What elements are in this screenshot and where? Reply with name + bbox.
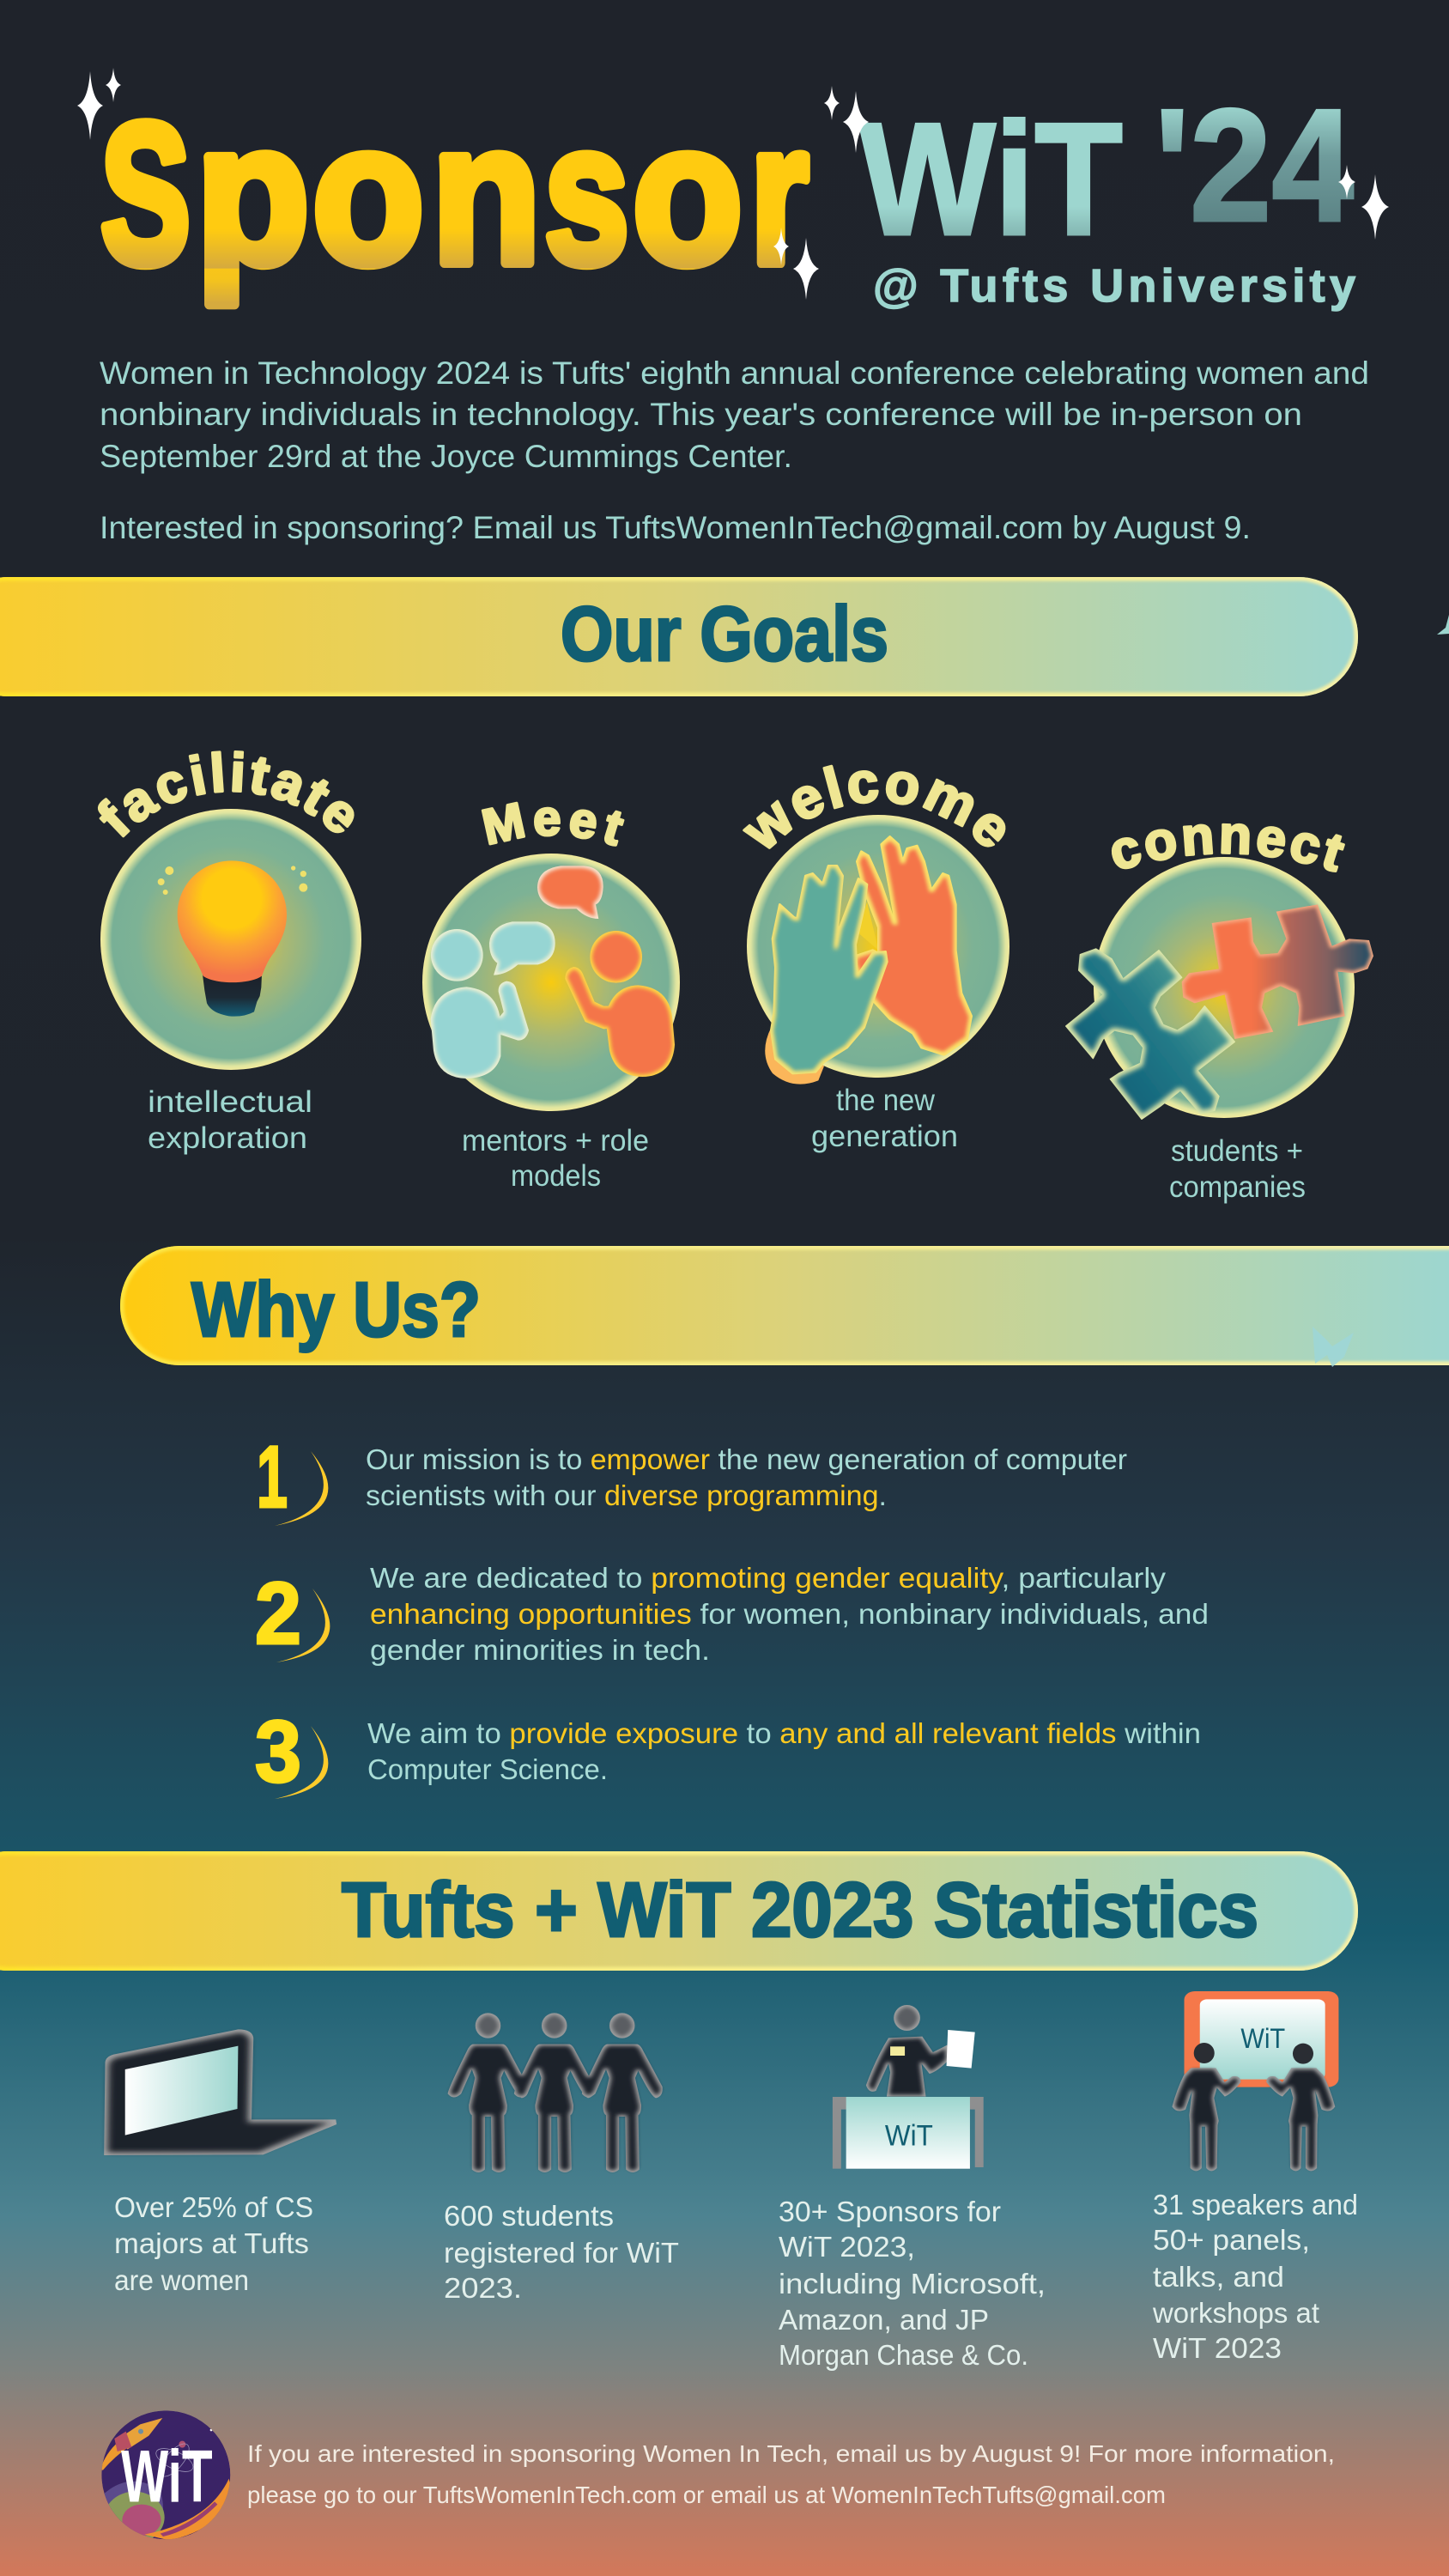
panel: connect [1065,823,1373,1204]
panel: reason 3: Computer Science. [367,1753,608,1785]
crescent [275,1726,328,1799]
caption: 600 students [444,2200,614,2232]
panel: stat speakers: talks, and [1153,2261,1284,2293]
banner: Our Goals: Our Goals [561,592,888,677]
caption: students + [1171,1134,1303,1168]
panel: stat women majors: majors at Tufts [114,2227,309,2259]
panel: stat sponsors: Morgan Chase & Co. [779,2339,1028,2371]
panel: stat speakers [1152,1991,1358,2364]
icon: speakers at a board [1172,1991,1338,2171]
intro text: Women in Technology 2024 is Tufts' eighth annual conference celebrating women and [100,355,1369,391]
panel: reason 2 [255,1562,1209,1666]
text: Our mission is to empower the new generation of computer [366,1443,1127,1475]
panel: reason 2: gender minorities in tech. [370,1634,710,1666]
intro text: nonbinary individuals in technology. This year's conference will be in-person on [100,397,1302,432]
heading: '24: '24 [1155,76,1354,255]
footer text: If you are interested in sponsoring Women In Tech, email us by August 9! For more information, [247,2440,1335,2467]
panel: facilitate [98,750,361,1155]
panel: meet: models [511,1159,601,1193]
orb [422,854,680,1111]
heading: connect: connect [1111,823,1345,872]
panel: stat women majors: are women [114,2264,249,2296]
panel: stat women majors [104,2029,336,2296]
heading: Meet: Meet [481,802,625,847]
panel: welcome: generation [811,1120,958,1153]
panel: stat students [444,2013,679,2304]
icon: three people [448,2013,663,2172]
number 1: 1 [257,1428,288,1526]
heading: Sponsor: o [633,82,743,306]
panel: stat speakers: workshops at [1152,2297,1319,2329]
icon: speakers at a board: WiT [1240,2023,1285,2054]
panel: welcome [743,764,1009,1153]
heading: Sponsor: s [544,82,629,306]
panel: stat sponsors: including Microsoft, [779,2268,1046,2300]
caption: the new [836,1084,936,1117]
title [77,68,1389,312]
heading: Sponsor: n [432,82,541,306]
icon: high five hands [765,836,972,1084]
icon: WiT logo: WiT [121,2435,213,2518]
heading: facilitate: facilitate [98,750,355,838]
caption: 30+ Sponsors for [779,2196,1001,2227]
crescent [276,1589,330,1662]
crescent [275,1451,328,1526]
text: We are dedicated to promoting gender equality , particularly [370,1562,1167,1594]
heading: Sponsor: r [750,82,809,306]
text: We aim to provide exposure to any and all relevant fields within [367,1717,1201,1749]
subheading: at Tufts University: @ Tufts University [873,260,1355,312]
icon: people talking [431,866,675,1078]
icon: WiT logo [100,2410,232,2543]
panel: stat sponsors: Amazon, and JP [779,2304,989,2336]
panel: reason 3 [255,1703,1201,1801]
banner: Why Us? [120,1246,1449,1367]
banner: Tufts + WiT 2023 Statistics: Tufts + WiT 2023 Statistics [342,1868,1258,1953]
heading: Sponsor: p [196,82,309,306]
panel: reason 2: enhancing opportunities for women, nonbinary individuals, and [370,1598,1209,1630]
panel: stat students: 2023. [444,2272,522,2304]
caption: 31 speakers and [1153,2189,1358,2221]
banner: Our Goals [0,577,1358,696]
banner: Tufts + WiT 2023 Statistics [0,1851,1358,1971]
intro text [100,355,1369,545]
panel: connect: companies [1169,1170,1306,1204]
icon: small teal star at edge [1437,615,1449,635]
panel: meet [422,802,680,1193]
heading: welcome: welcome [743,764,1006,849]
orb [100,809,361,1070]
banner: Why Us?: Why Us? [191,1267,481,1353]
icon: light bulb [158,860,307,1017]
panel: stat sponsors [779,2005,1046,2371]
panel: stat sponsors: WiT 2023, [779,2231,915,2263]
panel: reason 1: scientists with our diverse programming . [366,1479,887,1511]
orb [747,815,1009,1078]
caption: mentors + role [462,1124,649,1157]
icon: sparkles [77,68,1389,300]
caption: intellectual [148,1085,312,1119]
intro text: Interested in sponsoring? Email us TuftsWomenInTech@gmail.com by August 9. [100,510,1251,545]
heading: WiT: WiT [859,89,1123,269]
orb [1094,857,1355,1118]
icon: sponsor at booth: WiT [885,2119,933,2152]
icon: laptop [104,2029,336,2155]
footer text: please go to our TuftsWomenInTech.com or email us at WomenInTechTufts@gmail.com [247,2482,1166,2508]
panel: stat speakers: WiT 2023 [1153,2332,1282,2364]
panel: facilitate: exploration [148,1121,307,1155]
heading: Sponsor: S [100,82,191,306]
heading: Sponsor: o [312,82,424,306]
icon: sponsor at booth [833,2005,984,2169]
panel: reason 1 [257,1428,1127,1526]
number 3: 3 [255,1703,301,1801]
intro text: September 29rd at the Joyce Cummings Center. [100,439,792,474]
panel: stat students: registered for WiT [444,2237,679,2269]
panel: stat speakers: 50+ panels, [1153,2224,1310,2256]
icon: puzzle pieces [1066,904,1373,1119]
number 2: 2 [255,1564,301,1662]
footer text [247,2440,1335,2508]
caption: Over 25% of CS [114,2191,313,2223]
